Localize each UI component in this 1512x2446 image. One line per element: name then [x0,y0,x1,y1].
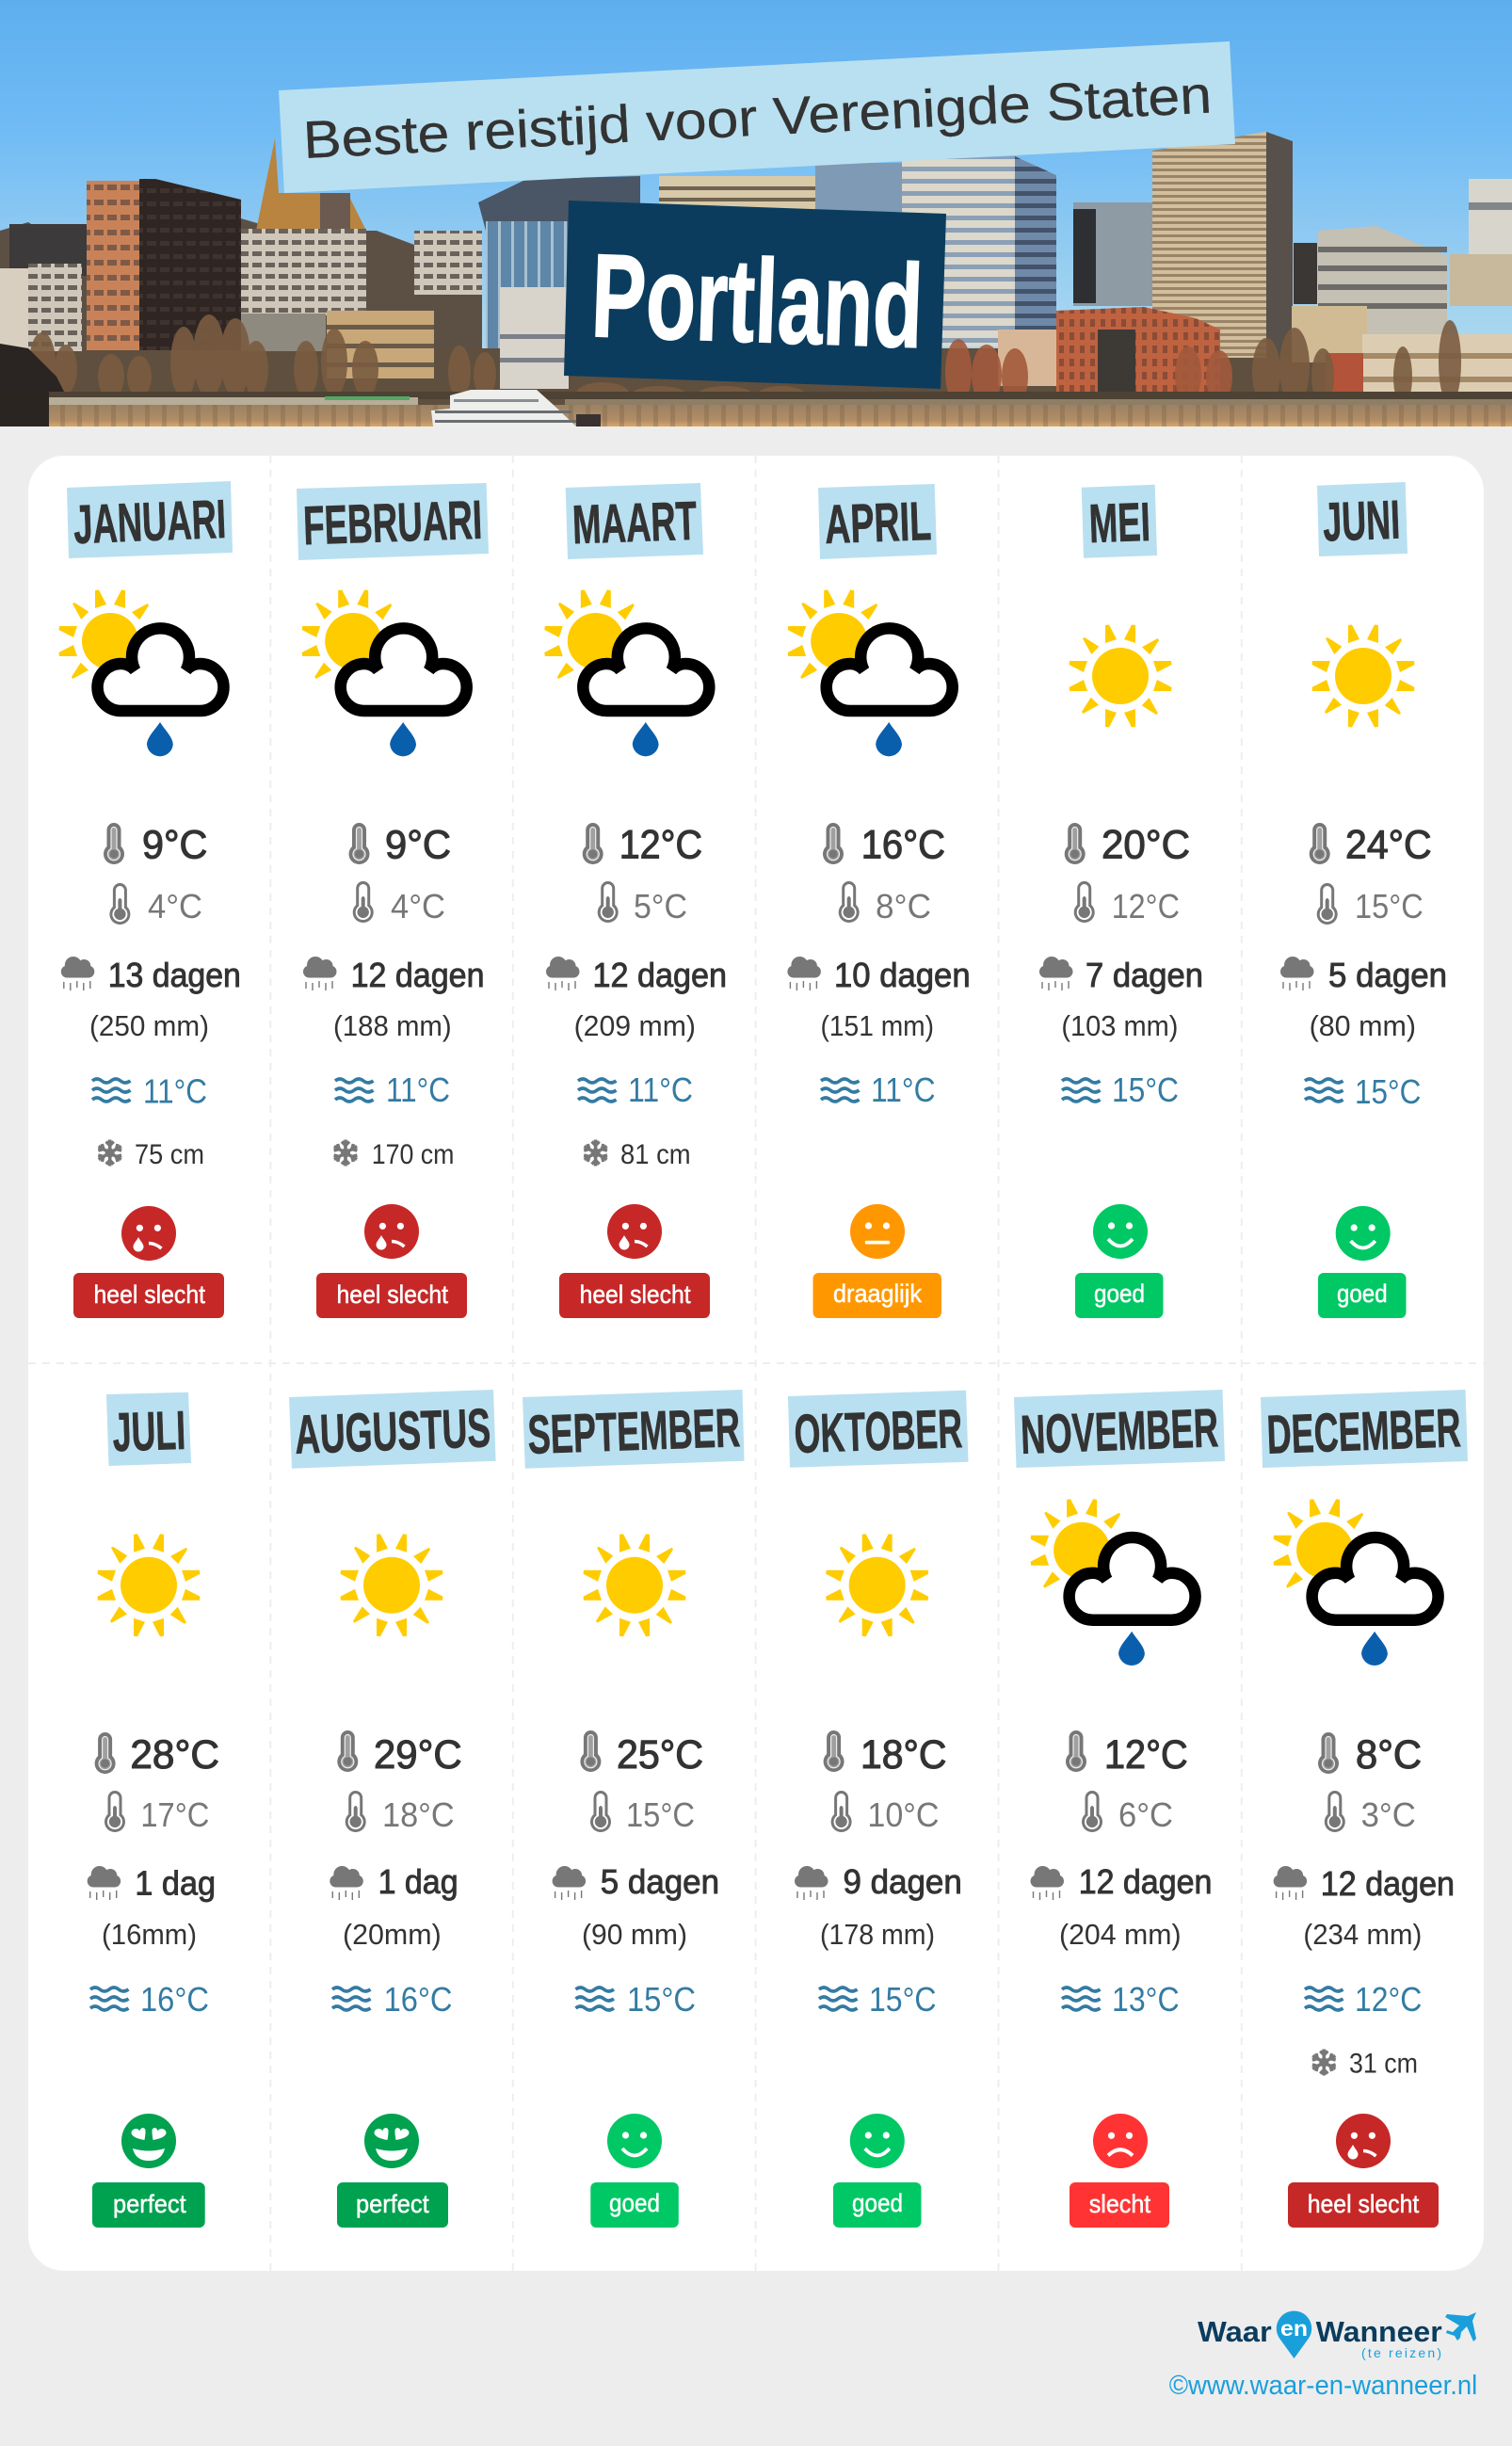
max temperature [337,1730,462,1778]
column: oktober [788,1391,968,2228]
rating face [1336,2114,1391,2168]
max temperature: 9°C [142,823,207,868]
water temperature [92,1072,207,1111]
rating face [364,2114,419,2168]
rain days: 10 dagen [834,956,971,994]
month label [818,484,937,559]
water temperature: 15°C [1112,1070,1179,1109]
max temperature [583,823,702,868]
water temperature: 15°C [1355,1072,1421,1111]
rating badge [813,1273,941,1318]
snowfall: 170 cm [372,1139,454,1170]
water temperature: 11°C [143,1072,207,1111]
min temperature: 12°C [1112,887,1180,925]
rating face [1093,2114,1148,2168]
month label [106,1392,191,1466]
website credit: ©www.waar-en-wanneer.nl [1169,2371,1477,2401]
rating face [121,2114,176,2168]
rain days: 5 dagen [601,1862,719,1901]
rain days [553,1862,719,1901]
rainfall: (80 mm) [1310,1009,1416,1042]
rain days: 1 dag [135,1863,216,1902]
min temperature [598,881,687,925]
column: september [523,1390,744,2228]
max temperature [823,823,945,868]
panel: month grid [28,456,1484,2271]
water temperature: 11°C [386,1070,450,1109]
logo: Waar en Wanneer: (te reizen) [1361,2345,1441,2360]
max temperature: 18°C [861,1732,946,1778]
column: augustus [289,1390,496,2228]
column: april [787,484,971,1318]
month label: FEBRUARI [302,490,483,556]
month label [523,1390,744,1469]
rating badge: perfect [356,2190,429,2218]
column: mei [1039,485,1203,1318]
icon: map pin [1277,2310,1311,2358]
rain days [795,1862,962,1901]
rating badge [92,2182,205,2228]
max temperature: 20°C [1102,823,1190,868]
water temperature [576,1980,696,2019]
min temperature: 6°C [1118,1795,1173,1834]
rating badge: goed [1094,1279,1145,1308]
rain days: 1 dag [378,1862,458,1901]
photo: Portland skyline [0,0,1512,426]
rating badge: goed [609,2189,660,2217]
min temperature [590,1791,695,1834]
water temperature [1062,1980,1180,2019]
rating badge [1318,1273,1407,1318]
rain days [88,1863,216,1902]
rating badge [1075,1273,1164,1318]
icon: sun and rain cloud [58,589,224,756]
rain days: 7 dagen [1086,956,1203,994]
title banner [279,41,1235,193]
logo: Waar en Wanneer: Waar [1198,2315,1272,2348]
rating badge: perfect [113,2190,186,2218]
month label: JUNI [1322,490,1401,554]
rain days: 5 dagen [1328,956,1447,994]
rain days: 12 dagen [351,956,484,994]
rating badge [833,2182,921,2228]
rating badge: heel slecht [337,1280,448,1309]
month label: AUGUSTUS [294,1397,491,1466]
rating face [850,2114,905,2168]
min temperature [109,883,202,925]
water temperature: 16°C [384,1980,452,2019]
max temperature [1310,823,1432,868]
month label [289,1390,496,1469]
rating badge [73,1273,224,1318]
rain days: 12 dagen [1079,1862,1212,1901]
rating badge: draaglijk [833,1279,922,1308]
rainfall: (209 mm) [574,1009,696,1042]
max temperature: 28°C [130,1732,219,1778]
min temperature: 3°C [1361,1795,1416,1834]
rating face [121,1206,176,1261]
max temperature: 16°C [861,823,945,868]
rating badge: goed [1337,1279,1388,1308]
city name block: Portland [589,229,925,373]
month label [566,483,703,559]
rating badge [559,1273,710,1318]
rating badge: heel slecht [580,1280,691,1309]
snowfall [332,1139,454,1170]
rating face [1336,1206,1391,1261]
max temperature: 12°C [619,823,702,868]
month label: APRIL [824,491,932,555]
min temperature [1325,1791,1416,1834]
max temperature: 24°C [1345,823,1432,868]
icon: airplane [1445,2312,1476,2341]
min temperature [105,1791,209,1834]
min temperature [346,1791,455,1834]
month label: OKTOBER [794,1398,963,1465]
icon: sun and rain cloud [544,589,709,756]
snowfall [1311,2049,1418,2080]
rainfall: (204 mm) [1059,1918,1182,1951]
max temperature [104,823,207,868]
city name block [564,201,946,389]
month label [788,1391,968,1468]
column: juni [1280,482,1447,1318]
water temperature: 11°C [871,1070,936,1109]
rating face [1093,1204,1148,1259]
min temperature [353,881,445,925]
water temperature: 15°C [627,1980,696,2019]
min temperature [1074,881,1180,925]
rainfall: (103 mm) [1061,1009,1178,1042]
month label [67,481,233,558]
icon: sun and rain cloud [1031,1499,1196,1666]
icon: sun [584,1534,685,1636]
icon: sun and rain cloud [1274,1499,1439,1666]
snowfall [582,1139,691,1170]
month label: SEPTEMBER [526,1397,741,1466]
column: maart [544,483,727,1318]
month label: JULI [112,1400,186,1463]
max temperature: 8°C [1356,1732,1422,1778]
column: juli [88,1392,219,2228]
rating face [364,1204,419,1259]
logo: Waar en Wanneer: Wanneer [1316,2315,1442,2348]
max temperature: 25°C [617,1732,703,1778]
rain days [330,1862,458,1901]
min temperature [839,881,931,925]
rating badge: slecht [1089,2190,1151,2218]
max temperature [348,823,451,868]
min temperature [831,1791,940,1834]
month label [297,483,489,560]
water temperature [332,1980,452,2019]
rainfall: (16mm) [102,1918,197,1951]
column: november [1014,1390,1225,2228]
rating badge: goed [852,2189,903,2217]
icon: sun [341,1534,442,1636]
rating face [850,1204,905,1259]
rating badge [1288,2182,1439,2228]
water temperature: 16°C [140,1980,209,2019]
min temperature: 17°C [140,1795,209,1834]
month label: MAART [571,491,698,555]
snowfall [97,1139,204,1170]
max temperature [1066,1730,1188,1778]
rain days: 9 dagen [844,1862,962,1901]
max temperature [580,1730,703,1778]
rain days [1280,956,1447,994]
min temperature: 15°C [626,1795,695,1834]
water temperature: 11°C [628,1070,693,1109]
icon: sun [1070,625,1171,727]
min temperature: 5°C [634,887,687,925]
rain days: 13 dagen [108,956,241,994]
rating face [607,2114,662,2168]
rain days [1039,956,1203,994]
rating face [607,1204,662,1259]
water temperature [819,1980,936,2019]
water temperature [578,1070,693,1109]
logo: Waar en Wanneer [1198,2310,1476,2360]
water temperature: 13°C [1112,1980,1180,2019]
rating badge: heel slecht [1308,2190,1420,2218]
min temperature: 8°C [876,887,931,925]
rainfall: (178 mm) [820,1918,935,1951]
min temperature [1317,883,1424,925]
rainfall: (188 mm) [333,1009,452,1042]
month label: NOVEMBER [1020,1397,1219,1466]
water temperature [90,1980,209,2019]
water temperature [821,1070,936,1109]
max temperature [1065,823,1190,868]
snowfall: 75 cm [135,1139,204,1170]
water temperature: 12°C [1355,1980,1422,2019]
min temperature: 18°C [382,1795,455,1834]
icon: sun and rain cloud [788,589,953,756]
rating badge [1070,2182,1169,2228]
snowfall: 81 cm [620,1139,691,1170]
month label [1317,482,1407,556]
rainfall: (90 mm) [582,1918,687,1951]
title banner: Beste reistijd voor Verenigde Staten [301,65,1213,169]
rain days: 12 dagen [1321,1864,1455,1903]
max temperature [824,1730,946,1778]
column: december [1261,1390,1468,2228]
snowfall: 31 cm [1349,2049,1418,2080]
max temperature: 9°C [385,823,451,868]
water temperature [1305,1072,1421,1111]
rating badge [337,2182,448,2228]
min temperature [1082,1791,1173,1834]
month label: MEI [1088,491,1151,555]
min temperature: 15°C [1355,887,1424,925]
rainfall: (20mm) [343,1918,442,1951]
rating badge: heel slecht [94,1280,205,1309]
month label [1014,1390,1225,1468]
month label: JANUARI [72,489,227,555]
water temperature [335,1070,450,1109]
min temperature: 4°C [148,887,202,925]
icon: sun [1312,625,1414,727]
rating badge [590,2182,679,2228]
icon: map pin: en [1280,2316,1308,2341]
icon: sun [98,1534,200,1636]
icon: sun and rain cloud [302,589,467,756]
rainfall: (250 mm) [89,1009,209,1042]
column: februari [297,483,489,1318]
water temperature: 15°C [869,1980,936,2019]
rating badge [316,1273,467,1318]
max temperature [1318,1732,1422,1778]
rain days: 12 dagen [593,956,727,994]
max temperature: 12°C [1104,1732,1188,1778]
rainfall: (234 mm) [1303,1918,1422,1951]
min temperature: 10°C [867,1795,940,1834]
water temperature [1305,1980,1422,2019]
column: januari [58,481,241,1318]
water temperature [1062,1070,1179,1109]
icon: sun [826,1534,928,1636]
min temperature: 4°C [391,887,445,925]
month label [1082,485,1157,558]
rainfall: (151 mm) [821,1009,934,1042]
max temperature: 29°C [374,1732,462,1778]
